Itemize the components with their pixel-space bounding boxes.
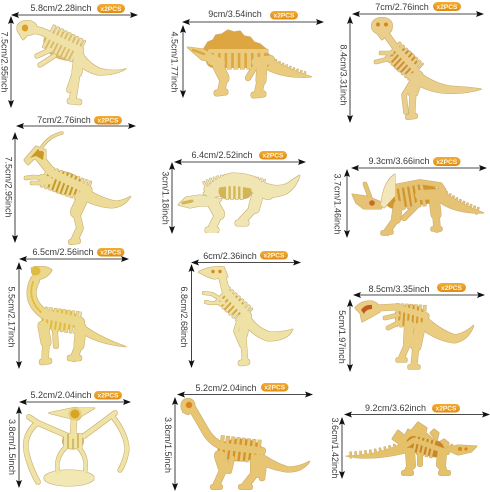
icon: stegosaurus skeleton	[345, 422, 477, 473]
height arrow	[341, 418, 343, 478]
height label: 7.5cm/2.95inch	[4, 156, 14, 218]
width label: 8.5cm/3.35inch	[368, 284, 430, 294]
badge	[432, 404, 460, 413]
panel: dinosaur 8	[179, 251, 300, 367]
width arrow	[352, 167, 486, 169]
width label: 7cm/2.76inch	[37, 115, 91, 125]
height arrow	[190, 265, 192, 367]
width label: 5.8cm/2.28inch	[30, 3, 92, 13]
height arrow	[14, 133, 16, 242]
badge: x2PCS	[441, 285, 463, 292]
panel: dinosaur 4	[4, 115, 135, 242]
width arrow	[17, 125, 135, 127]
width arrow	[178, 394, 312, 396]
panel: dinosaur 12	[330, 403, 489, 479]
icon: diplodocus skeleton	[181, 398, 310, 487]
height arrow	[18, 407, 20, 487]
height label: 5cm/1.97inch	[337, 310, 347, 364]
icon: parasaurolophus skeleton	[24, 133, 131, 242]
badge: x2PCS	[98, 393, 119, 400]
icon: triceratops skeleton	[352, 174, 484, 233]
width arrow	[354, 294, 484, 296]
panel: dinosaur 10	[7, 390, 130, 487]
width label: 6.5cm/2.56inch	[32, 247, 94, 257]
width arrow	[20, 258, 128, 260]
badge: x2PCS	[436, 406, 457, 413]
height arrow	[349, 300, 351, 371]
height label: 3.7cm/1.46inch	[332, 173, 342, 235]
panel: dinosaur 3	[338, 2, 483, 122]
badge: x2PCS	[264, 253, 285, 260]
badge	[433, 2, 461, 11]
panel: dinosaur 11	[163, 383, 312, 490]
badge: x2PCS	[100, 250, 122, 257]
height label: 3.8cm/1.5inch	[7, 419, 17, 475]
badge	[433, 157, 460, 166]
panel: dinosaur 5	[160, 150, 305, 233]
badge: x2PCS	[264, 385, 286, 392]
width label: 9.2cm/3.62inch	[365, 403, 426, 413]
icon: theropod skeleton	[372, 18, 482, 117]
badge: x2PCS	[263, 153, 284, 160]
panel: dinosaur 7	[6, 247, 128, 368]
panel: dinosaur 9	[337, 283, 484, 371]
icon: allosaurus skeleton	[355, 301, 474, 367]
width label: 7cm/2.76inch	[375, 2, 429, 12]
width label: 6cm/2.36inch	[203, 251, 257, 261]
height label: 3.8cm/1.5inch	[163, 417, 173, 473]
height label: 5.5cm/2.17inch	[6, 286, 16, 348]
height arrow	[349, 17, 351, 122]
height label: 6.8cm/2.68inch	[179, 286, 189, 348]
width label: 5.2cm/2.04inch	[195, 383, 257, 393]
icon: ankylosaurus skeleton	[178, 173, 300, 230]
panel: dinosaur 6	[332, 156, 486, 237]
icon: pachycephalosaurus skeleton	[17, 20, 127, 102]
height arrow	[174, 398, 176, 490]
height arrow	[10, 17, 12, 107]
badge	[259, 151, 287, 160]
badge	[261, 383, 288, 392]
width arrow	[12, 14, 137, 16]
width arrow	[345, 414, 489, 416]
panel: dinosaur 2	[170, 9, 323, 97]
width label: 6.4cm/2.52inch	[191, 150, 253, 160]
width label: 9cm/3.54inch	[208, 9, 262, 19]
height label: 4.5cm/1.77inch	[170, 31, 180, 93]
badge: x2PCS	[436, 159, 458, 166]
icon: raptor skeleton	[198, 267, 293, 363]
width arrow	[20, 401, 130, 403]
badge	[270, 11, 298, 20]
width label: 5.2cm/2.04inch	[30, 390, 92, 400]
icon: brachiosaurus skeleton	[31, 266, 127, 362]
height arrow	[182, 26, 184, 97]
width label: 9.3cm/3.66inch	[368, 156, 430, 166]
width arrow	[353, 13, 483, 15]
badge: x2PCS	[437, 4, 458, 11]
panel: dinosaur 1	[0, 3, 137, 107]
width arrow	[192, 262, 300, 264]
badge: x2PCS	[274, 13, 295, 20]
icon: dimetrodon skeleton	[187, 30, 312, 95]
icon: pterosaur skeleton	[26, 408, 127, 486]
height label: 3cm/1.18inch	[160, 171, 170, 225]
height arrow	[18, 263, 20, 368]
width arrow	[183, 21, 323, 23]
badge: x2PCS	[98, 118, 119, 125]
height label: 8.4cm/3.31inch	[338, 44, 348, 106]
height label: 3.6cm/1.42inch	[330, 417, 340, 479]
width arrow	[175, 161, 305, 163]
badge: x2PCS	[101, 6, 122, 13]
height arrow	[346, 170, 348, 237]
badge	[437, 283, 466, 292]
height arrow	[171, 163, 173, 233]
